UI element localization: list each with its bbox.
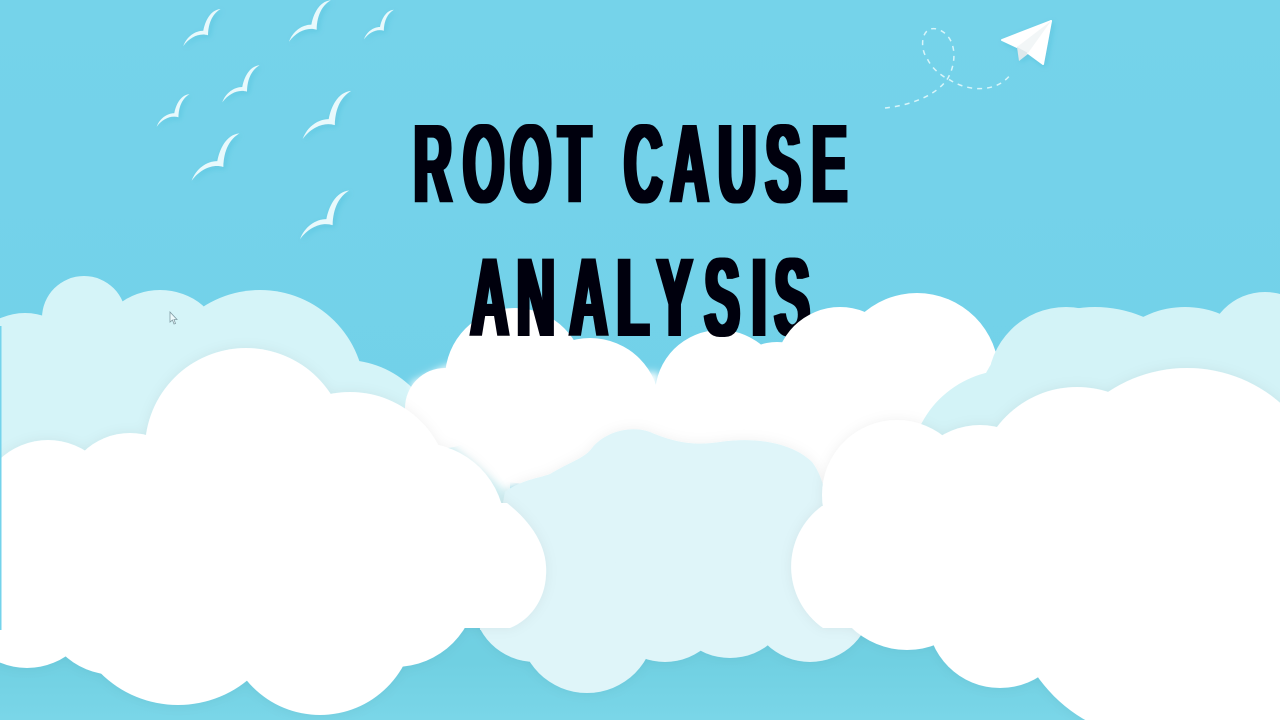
- cloud: centre pale: [473, 429, 872, 693]
- flock of birds: [157, 0, 394, 239]
- title: [414, 100, 847, 360]
- cloud: back right: [910, 292, 1280, 570]
- icon: mouse cursor: [170, 312, 177, 324]
- title: ANALYSIS: [471, 234, 810, 360]
- left edge sliver: [0, 326, 2, 630]
- cloud: back left: [0, 276, 510, 560]
- cloud: middle centre bump: [640, 330, 990, 520]
- cloud: middle left: [405, 308, 660, 490]
- dashed flight path: [885, 29, 1011, 108]
- cloud: front right: [791, 368, 1280, 720]
- title: ROOT CAUSE: [414, 100, 847, 227]
- icon: paper plane: [1002, 21, 1051, 64]
- cloud: front left: [0, 348, 546, 715]
- cloud: middle right: [775, 293, 999, 457]
